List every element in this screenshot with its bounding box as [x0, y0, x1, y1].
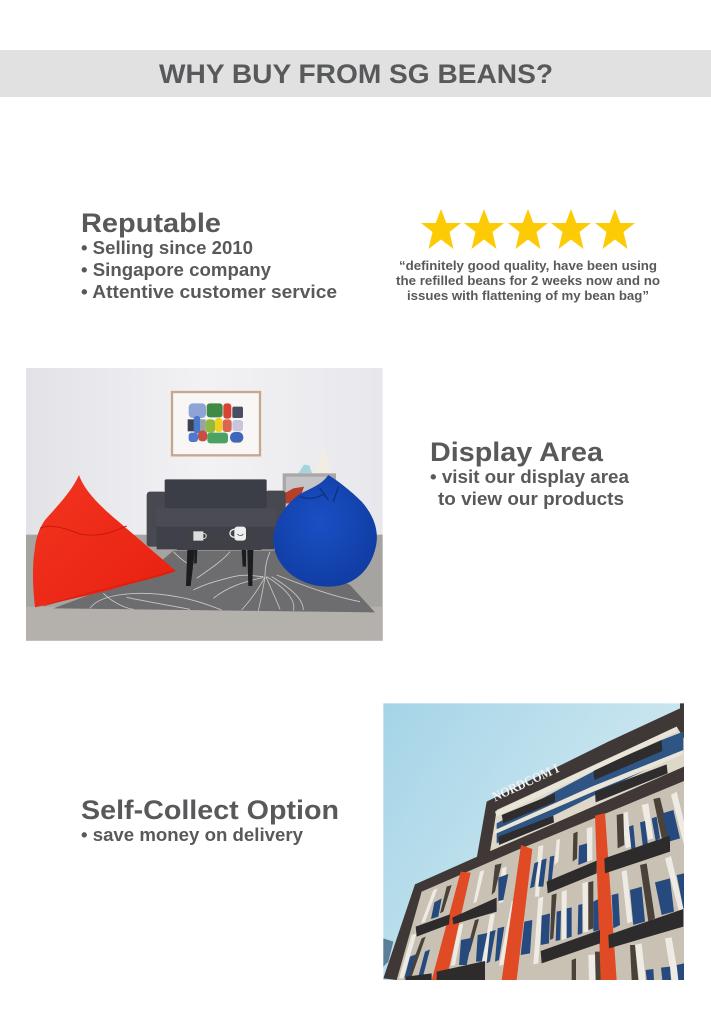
display area description: [430, 467, 630, 509]
panel: five star review: [396, 209, 660, 303]
dark pillars: [407, 798, 670, 980]
upper tower: [477, 703, 684, 858]
panel: self-collect text: [81, 795, 339, 845]
heading: self-collect option: Self-Collect Option: [81, 795, 339, 825]
side shelf with ornaments: [283, 448, 336, 507]
customer quote: issues with flattening of my bean bag”: [407, 289, 649, 303]
customer quote: “definitely good quality, have been using: [399, 259, 657, 273]
sofa: [147, 479, 286, 549]
framed painting: [172, 392, 260, 455]
bullet list: reputable points: • Attentive customer service: [81, 282, 337, 302]
sky: [383, 703, 684, 980]
header banner: [0, 50, 711, 97]
icon: blue bean bag: [273, 475, 377, 587]
display area description: • visit our display area: [430, 467, 630, 487]
customer quote: the refilled beans for 2 weeks now and no: [396, 274, 660, 288]
bullet list: reputable points: • Singapore company: [81, 260, 271, 280]
photo: nordcom building: [383, 703, 684, 980]
heading: reputable: Reputable: [81, 208, 221, 238]
bullet list: reputable points: [81, 238, 337, 302]
neighbouring building: [383, 938, 393, 967]
display area description: to view our products: [438, 489, 624, 509]
panel: display area text: [430, 437, 630, 509]
bullet list: reputable points: • Selling since 2010: [81, 238, 253, 258]
windows: [404, 810, 684, 980]
icon: red bean bag: [33, 475, 176, 607]
white pillars: [399, 792, 684, 980]
icon: five stars: [421, 209, 635, 249]
orange columns: [432, 813, 617, 980]
title: WHY BUY FROM SG BEANS?: [159, 59, 553, 89]
wall and floor: [26, 368, 383, 641]
rug: [53, 551, 375, 612]
lower facade: [383, 768, 684, 980]
photo: display room with bean bags: [26, 368, 383, 641]
customer quote: [396, 259, 660, 303]
panel: reputable text: [81, 208, 337, 302]
coffee table with mugs: [177, 527, 262, 586]
self-collect description: • save money on delivery: [81, 825, 303, 845]
heading: display area: Display Area: [430, 437, 604, 467]
sign: nordcom: NORDCOM I: [490, 761, 561, 804]
balconies: [405, 836, 683, 980]
